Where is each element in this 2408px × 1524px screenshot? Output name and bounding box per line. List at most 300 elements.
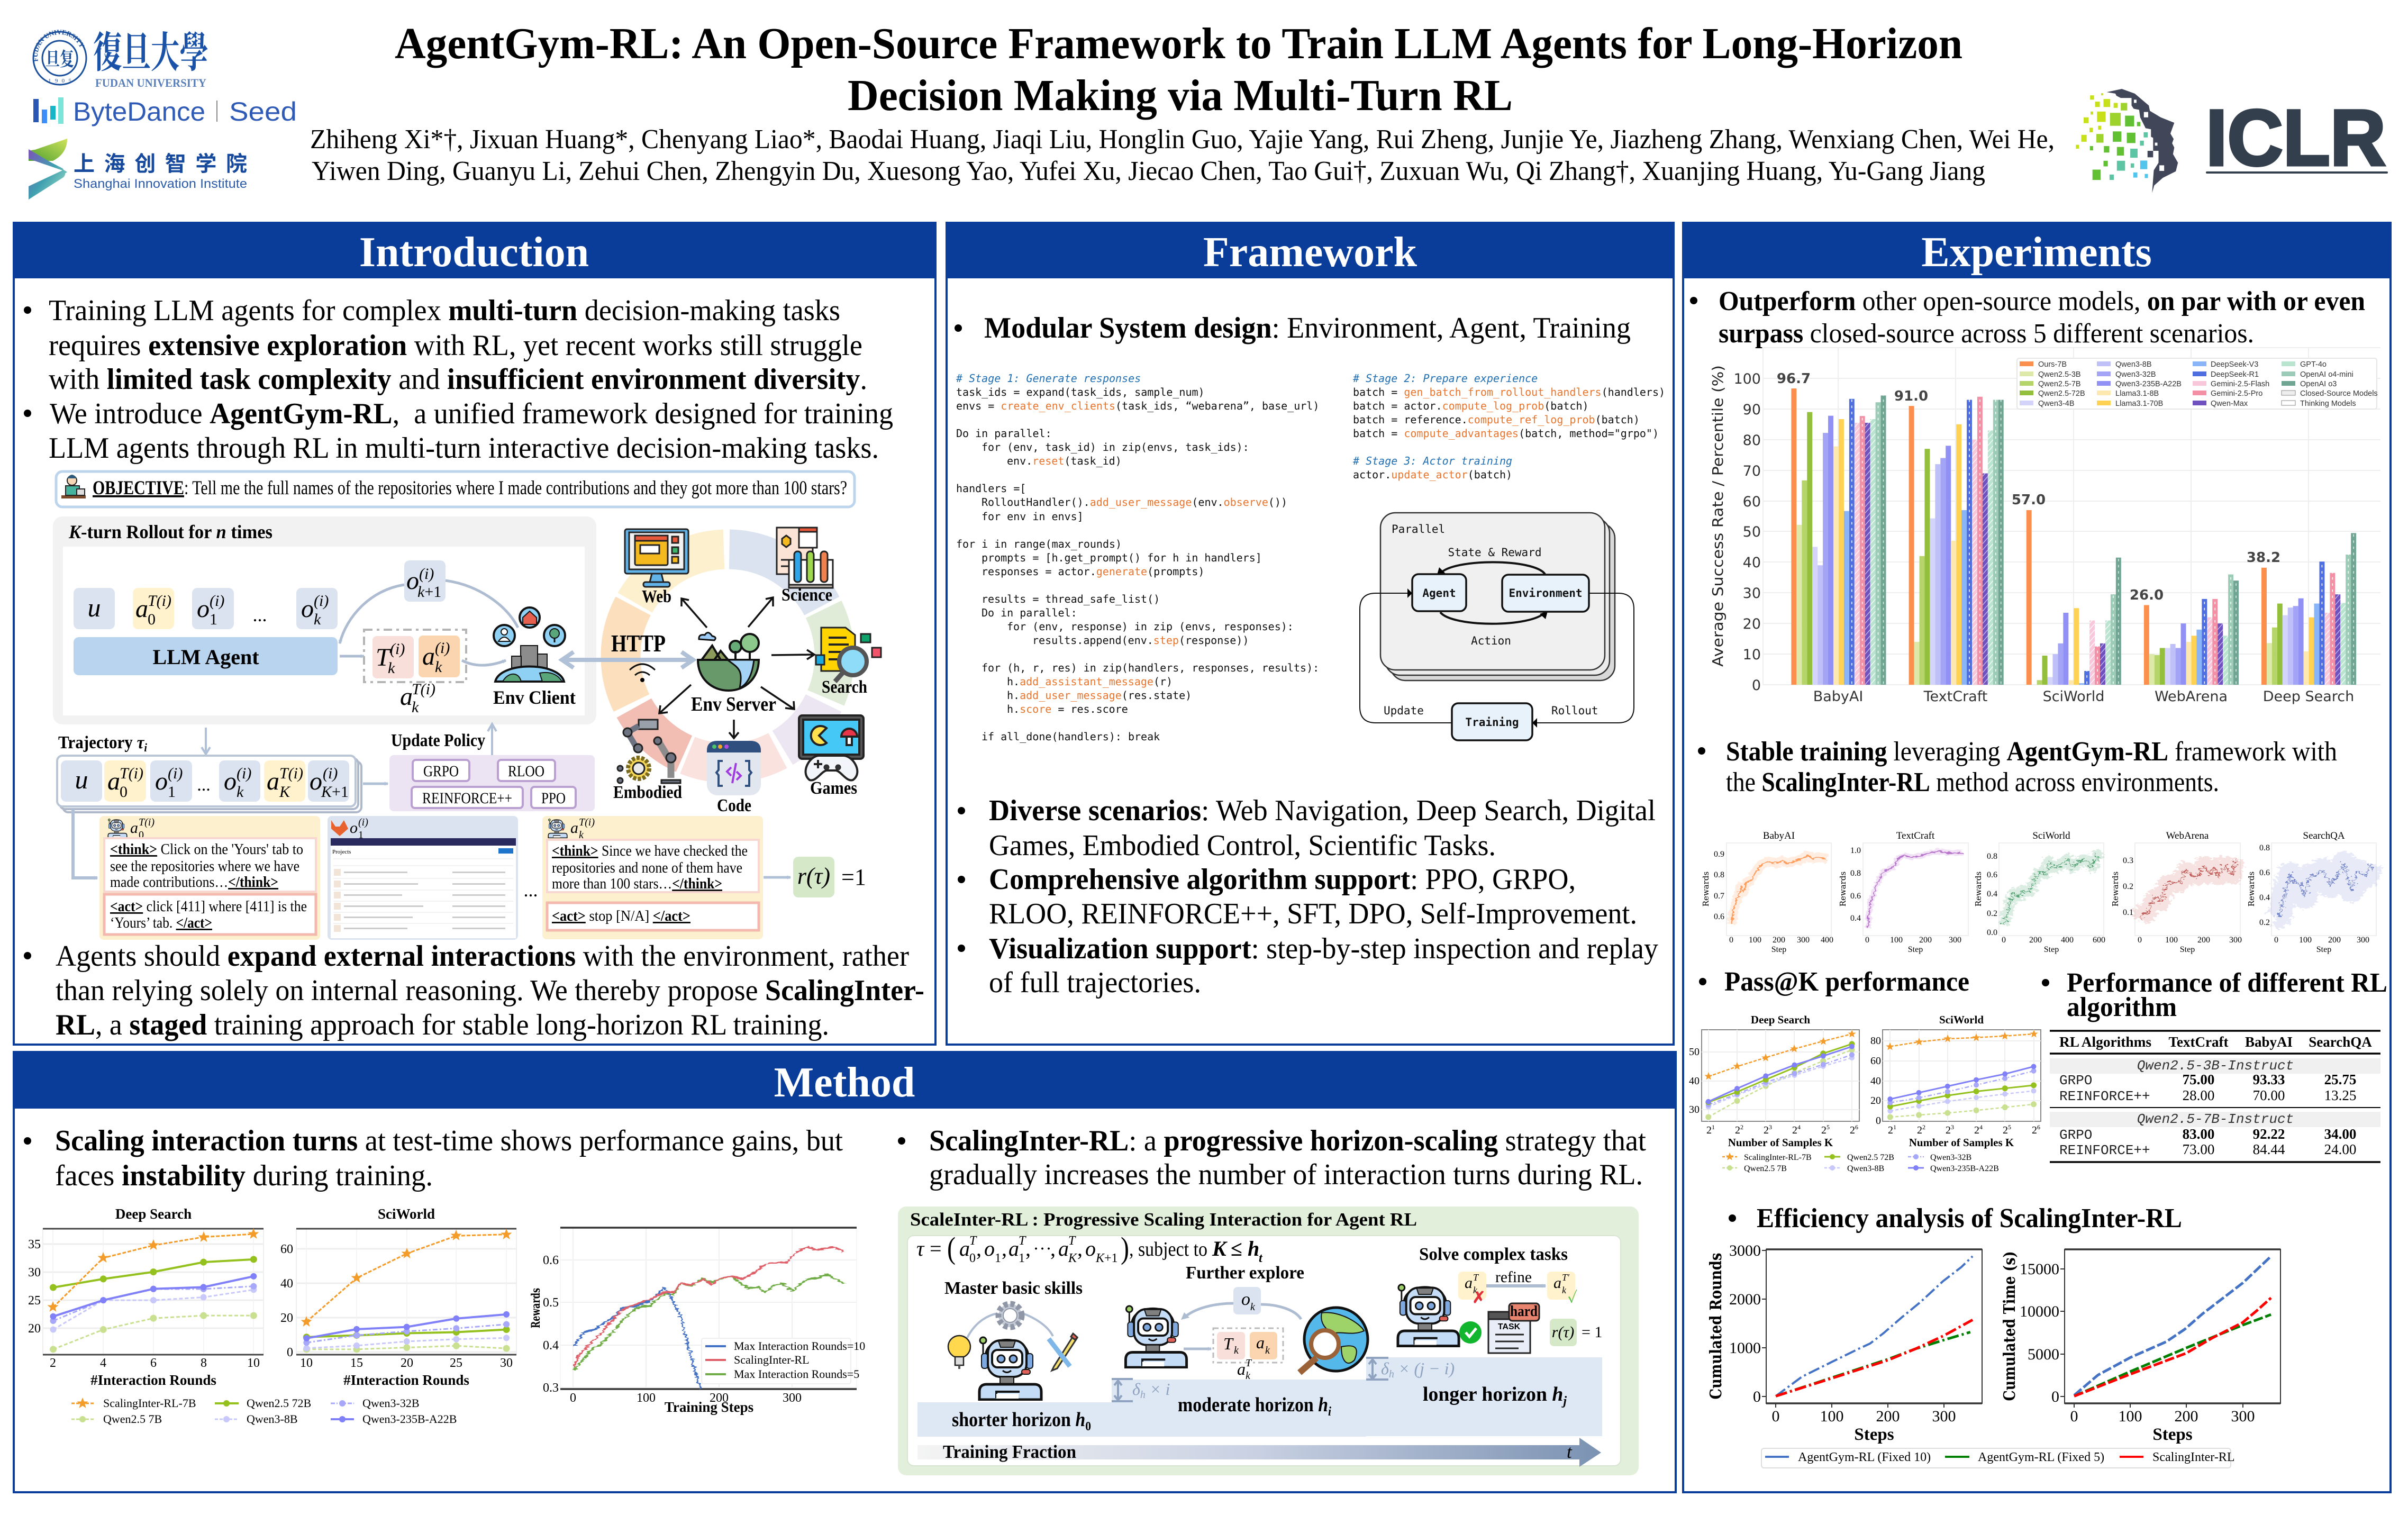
charts: pass@k: Deep Search — [1751, 1013, 1810, 1026]
panel: step a0: see the repositories where we have — [110, 858, 299, 875]
title: Decision Making via Multi-Turn RL — [848, 71, 1513, 120]
icon: fox — [331, 820, 348, 836]
charts: pass@k: 2 — [1792, 1124, 1797, 1136]
y axis label: Average Success Rate / Percentile (%) — [1709, 365, 1727, 667]
charts: interaction rounds: #Interaction Rounds — [90, 1372, 216, 1388]
formula: a — [959, 1237, 970, 1260]
text block: intro bullets: Training LLM agents for complex multi-turn decision-making tasks — [49, 294, 840, 327]
y axis ticks — [1733, 371, 1761, 694]
trajectory stack: (i) — [168, 765, 183, 782]
code: stage 1: envs = create_env_clients(task_ids, “webarena”, base_url) — [956, 400, 1319, 412]
formula: K — [1212, 1237, 1228, 1260]
action group: a — [422, 642, 435, 670]
x axis labels: BabyAI — [1813, 688, 1863, 705]
arrow: training fraction: Training Fraction — [943, 1441, 1076, 1462]
chart: training rewards: 0.3 — [543, 1381, 559, 1395]
charts: efficiency: 100 — [1820, 1408, 1843, 1425]
horizon steps — [917, 1357, 1602, 1437]
formula: , — [1002, 1237, 1007, 1260]
charts: efficiency: 2000 — [1729, 1291, 1761, 1308]
chart: training rewards: 0.6 — [543, 1254, 559, 1267]
formula: ) — [1121, 1231, 1129, 1265]
logo: Fudan University: 復旦大學 — [93, 19, 208, 79]
y axis ticks: 50 — [1743, 524, 1761, 540]
stage: further explore: k — [1250, 1301, 1256, 1313]
chart: training rewards: Max Interaction Rounds=5 — [734, 1367, 859, 1381]
code: stage 1: RolloutHandler().add_user_message(env.observe()) — [982, 496, 1287, 509]
legend: models: OpenAI o4-mini — [2300, 370, 2354, 379]
stage: solve complex tasks: a — [1465, 1274, 1473, 1292]
tokens row: (i) — [419, 565, 434, 583]
label: science: Science — [782, 585, 832, 605]
legend: models: Qwen3-32B — [2115, 370, 2156, 379]
bar value labels: 38.2 — [2247, 550, 2280, 566]
panel: ScaleInter-RL diagram — [898, 1206, 1639, 1475]
charts: efficiency: 200 — [2175, 1408, 2198, 1425]
charts: interaction rounds: 60 — [280, 1242, 293, 1256]
legend: pass@k — [1722, 1153, 1999, 1173]
text block: outperform: surpass closed-source across 5 different scenarios. — [1719, 319, 2254, 349]
charts: interaction rounds: 35 — [28, 1238, 41, 1251]
stage: master basic skills: Master basic skills — [944, 1278, 1083, 1298]
legend: models: DeepSeek-V3 — [2211, 360, 2258, 369]
charts: training curves: 0.4 — [1987, 890, 1997, 899]
logo: Fudan University: FUDAN UNIVERSITY — [95, 76, 206, 89]
charts: training curves: 200 — [1773, 936, 1785, 945]
legend: models: Qwen2.5-7B — [2038, 380, 2081, 388]
code: stage 1: for env in envs] — [982, 510, 1084, 523]
annotation: delta i: δ — [1132, 1380, 1140, 1399]
LLM agent bar — [74, 637, 338, 675]
charts: pass@k: 6 — [2037, 1123, 2040, 1131]
charts: interaction rounds — [28, 1206, 516, 1388]
charts: training curves: 400 — [1821, 936, 1833, 945]
text block: framework bullets: Diverse scenarios: Web Navigation, Deep Search, Digital — [989, 794, 1656, 827]
charts: training curves: Rewards — [1974, 872, 1983, 906]
formula: , — [1077, 1237, 1083, 1260]
stage: master basic skills: shorter horizon h — [952, 1409, 1087, 1431]
arrow: to reward — [764, 876, 790, 878]
charts: pass@k: 0 — [1876, 1115, 1881, 1127]
charts: training curves: 0 — [2002, 936, 2006, 945]
formula: , — [1025, 1237, 1031, 1260]
charts: training curves — [1701, 830, 2376, 954]
x axis labels: SciWorld — [2043, 688, 2104, 705]
charts: efficiency: 100 — [2119, 1408, 2142, 1425]
charts: training curves: 0 — [2138, 936, 2142, 945]
table: RL algorithms: GRPO — [2059, 1073, 2092, 1088]
icon: embodied — [617, 720, 680, 783]
legend: models: Llama3.1-8B — [2115, 389, 2159, 398]
charts: training curves: 200 — [2029, 936, 2042, 945]
text block: scalinginter-rl: ScalingInter-RL: a progressive horizon-scaling strategy that — [929, 1124, 1646, 1157]
y axis ticks: 30 — [1743, 585, 1761, 602]
title — [395, 19, 1962, 120]
charts: efficiency: Steps — [1854, 1425, 1894, 1444]
charts: interaction rounds: 25 — [28, 1294, 41, 1308]
charts: training curves: 0.8 — [2259, 843, 2270, 852]
charts: training curves: BabyAI — [1763, 830, 1795, 841]
trajectory stack: o — [310, 767, 322, 795]
label: update policy: Update Policy — [391, 731, 485, 750]
charts: training curves: Step — [2180, 945, 2195, 954]
text block: scaling interaction turns: Scaling interaction turns at test-time shows performance gains, but — [55, 1124, 843, 1157]
text block: intro bullets: LLM agents through RL in multi-turn interactive decision-making tasks. — [49, 432, 879, 465]
charts: training curves: Step — [2044, 945, 2059, 954]
charts: pass@k: 40 — [1870, 1075, 1881, 1087]
diagram: training loop: Environment — [1509, 587, 1583, 600]
charts: training curves: 0.0 — [1987, 928, 1997, 937]
charts: training curves: 100 — [2299, 936, 2312, 945]
charts: training curves: SciWorld — [2032, 830, 2070, 841]
formula: t — [1259, 1251, 1263, 1265]
text block: intro bullets: We introduce AgentGym-RL, a unified framework designed for training — [50, 397, 893, 430]
stage: further explore: k — [1246, 1370, 1251, 1382]
icon: success check — [1459, 1321, 1482, 1344]
tokens row: ... — [253, 604, 267, 625]
text block: framework bullets: RLOO, REINFORCE++, SFT, DPO, Self-Improvement. — [989, 897, 1637, 930]
heading: pass@k: Pass@K performance — [1724, 967, 1969, 997]
panel: step ak: repositories and none of them have — [552, 860, 742, 876]
icon: person at laptop — [61, 475, 86, 498]
panel: ScaleInter-RL diagram: ScaleInter-RL : Progressive Scaling Interaction for Agent RL — [910, 1209, 1417, 1230]
charts: training curves: 0.2 — [1987, 909, 1997, 918]
trajectory stack: k — [237, 783, 244, 801]
stage: solve complex tasks: hard — [1510, 1303, 1538, 1320]
code: stage 1: handlers =[ — [956, 482, 1026, 495]
stage: further explore: a — [1237, 1359, 1246, 1378]
panel: method — [14, 1052, 1676, 1492]
arrow: policy up — [488, 724, 496, 756]
legend: interaction rounds: Qwen3-32B — [362, 1396, 420, 1410]
icon: bulb — [948, 1336, 970, 1369]
charts: efficiency: 1000 — [1729, 1339, 1761, 1357]
charts: training curves: Step — [1908, 945, 1923, 954]
charts: pass@k — [1689, 1013, 2380, 1468]
code: stage 1: for i in range(max_rounds) — [956, 538, 1122, 550]
table: RL algorithms: 34.00 — [2324, 1126, 2356, 1142]
legend: efficiency: AgentGym-RL (Fixed 5) — [1978, 1450, 2104, 1464]
charts: efficiency: 300 — [2231, 1408, 2255, 1425]
legend: models: Gemini-2.5-Flash — [2211, 380, 2269, 388]
legend: interaction rounds: Qwen3-235B-A22B — [362, 1412, 457, 1426]
panel: step a0: <think> Click on the 'Yours' tab to — [110, 841, 303, 858]
formula: 0 — [969, 1251, 976, 1265]
stage: further explore: i — [1328, 1405, 1331, 1419]
table: RL algorithms: 28.00 — [2183, 1087, 2214, 1103]
legend: models: GPT-4o — [2300, 360, 2327, 369]
tokens row: u — [88, 593, 101, 622]
arrow: trajectory to steps — [73, 810, 97, 878]
stage: further explore: moderate horizon h — [1178, 1394, 1330, 1416]
formula: h — [1248, 1237, 1259, 1260]
table: RL algorithms: BabyAI — [2245, 1034, 2293, 1050]
action group: T — [376, 643, 392, 672]
legend: efficiency: ScalingInter-RL — [2152, 1450, 2234, 1464]
label: trajectory: Trajectory τ — [58, 733, 145, 752]
formula: 1 — [1019, 1251, 1025, 1265]
icon: gear — [998, 1304, 1022, 1327]
table: RL algorithms — [2050, 1031, 2380, 1162]
panel: step ak: <act> stop [N/A] </act> — [552, 908, 690, 924]
stage: master basic skills: 0 — [1085, 1420, 1091, 1434]
legend: models: DeepSeek-R1 — [2211, 370, 2259, 379]
charts: efficiency — [1707, 1242, 2280, 1444]
table: RL algorithms: 70.00 — [2253, 1087, 2285, 1103]
code: stage 1: task_ids = expand(task_ids, sample_num) — [956, 386, 1205, 398]
charts: efficiency: 0 — [2070, 1408, 2078, 1425]
stage: solve complex tasks: T′ — [1562, 1272, 1570, 1283]
code: stage 1: prompts = [h.get_prompt() for h in handlers] — [982, 551, 1262, 564]
panel: step ak — [542, 816, 763, 939]
stage: solve complex tasks: refine — [1495, 1268, 1532, 1286]
charts: training curves: 200 — [1919, 936, 1932, 945]
formula: , — [1050, 1237, 1056, 1260]
text block: intro bullets: requires extensive exploration with RL, yet recent works still struggle — [49, 329, 862, 362]
table: RL algorithms: 83.00 — [2183, 1126, 2214, 1142]
panel: framework — [947, 223, 1674, 1045]
charts: pass@k: 80 — [1870, 1035, 1881, 1047]
tokens row: o — [301, 595, 314, 623]
diagram: training loop: State & Reward — [1448, 546, 1542, 559]
charts: training curves: 300 — [2229, 936, 2242, 945]
charts: pass@k: 2 — [2032, 1124, 2037, 1136]
charts: interaction rounds: 30 — [500, 1356, 513, 1370]
action group — [364, 630, 466, 716]
label: env server: Env Server — [691, 693, 776, 715]
charts: pass@k: 2 — [1706, 1124, 1712, 1136]
code: stage 1: results = thread_safe_list() — [982, 593, 1160, 605]
label: HTTP with wifi icon — [611, 630, 666, 682]
action group: (i) — [390, 640, 405, 658]
tokens row: (i) — [210, 592, 224, 610]
charts: pass@k: 2 — [1922, 1123, 1925, 1131]
charts: pass@k: 3 — [1769, 1123, 1772, 1131]
formula: T — [1019, 1234, 1026, 1248]
table: RL algorithms: 93.33 — [2253, 1072, 2285, 1087]
charts: training curves: TextCraft — [1896, 830, 1935, 841]
legend: pass@k: Qwen3-8B — [1847, 1164, 1884, 1173]
charts: training curves: 0.6 — [1714, 912, 1724, 921]
y axis ticks: 100 — [1733, 371, 1761, 387]
stage: solve complex tasks: T — [1473, 1272, 1479, 1283]
panel: step ak: k — [579, 829, 584, 841]
charts: interaction rounds: 20 — [28, 1322, 41, 1336]
charts: training curves: 0.6 — [2259, 868, 2270, 877]
text block: stable training — [1698, 737, 2337, 797]
reward box: r(τ) — [797, 863, 830, 889]
panel: step a0: a — [130, 819, 138, 837]
text block: intro closing: RL, a staged training approach for stable long-horizon RL training. — [56, 1009, 829, 1041]
panel: step a0: <act> click [411] where [411] is the — [110, 899, 307, 915]
label: search: Search — [822, 677, 867, 697]
x axis labels: TextCraft — [1923, 688, 1987, 705]
stage: solve complex tasks: ✗ — [1472, 1289, 1486, 1307]
charts: efficiency: 0 — [1771, 1408, 1780, 1425]
charts: interaction rounds: 6 — [150, 1356, 157, 1370]
logo: ICLR — [2076, 89, 2388, 193]
charts: pass@k: 2 — [1821, 1124, 1827, 1136]
authors: Yiwen Ding, Guanyu Li, Zehui Chen, Zhengyin Du, Xuesong Yao, Yufei Xu, Jiecao Chen, Tao Gui†, Zuxuan Wu, Qi Zhang†, Xuanjing Huang, Yu-Gang Jiang — [312, 156, 1985, 186]
table: RL algorithms: Qwen2.5-3B-Instruct — [2137, 1058, 2294, 1074]
charts: training curves: WebArena — [2166, 830, 2209, 841]
code: stage 2 and 3: # Stage 3: Actor training — [1352, 455, 1512, 467]
chart: training rewards: 100 — [637, 1391, 656, 1405]
charts: pass@k: 4 — [1797, 1123, 1801, 1131]
code: stage 2 and 3: batch = actor.compute_log_prob(batch) — [1353, 400, 1589, 412]
icon: tools — [1049, 1334, 1077, 1371]
stage: solve complex tasks: j — [1561, 1394, 1567, 1408]
label: code: Code — [717, 796, 751, 815]
panel: step a0: 0 — [139, 829, 144, 841]
panel: step a0 — [99, 816, 320, 940]
charts: pass@k: 1 — [1893, 1123, 1896, 1131]
formula: = — [930, 1237, 942, 1260]
legend: interaction rounds: Qwen2.5 72B — [247, 1396, 311, 1410]
heading: Introduction — [14, 223, 935, 278]
charts: training curves: 600 — [2093, 936, 2105, 945]
legend: models: Ours-7B — [2038, 360, 2067, 369]
charts: training curves: 100 — [1749, 936, 1761, 945]
icon: env server — [698, 632, 759, 691]
charts: training curves: 0.8 — [1714, 870, 1724, 879]
logo: Fudan University — [33, 19, 208, 89]
code: stage 1: results.append(env.step(response)) — [1032, 634, 1249, 647]
heading: Framework: Framework — [1203, 229, 1417, 276]
panel: observation screenshot: Projects — [332, 849, 351, 855]
heading: RL algorithm performance — [2042, 968, 2387, 1022]
stage: further explore: k — [1234, 1345, 1239, 1356]
legend: interaction rounds: Qwen3-8B — [247, 1412, 298, 1426]
formula: , subject to — [1129, 1238, 1207, 1260]
code: stage 1: # Stage 1: Generate responses — [956, 372, 1141, 385]
stage: solve complex tasks: = 1 — [1582, 1323, 1602, 1341]
annotation: delta i — [1112, 1379, 1170, 1401]
legend: models: Qwen3-8B — [2115, 360, 2152, 369]
table: RL algorithms: GRPO — [2059, 1127, 2092, 1143]
panel: observation screenshot: 1 — [358, 829, 364, 841]
tokens row: o — [197, 595, 210, 623]
tokens row — [74, 560, 446, 629]
diagram: training loop: Parallel — [1392, 523, 1445, 536]
charts: training curves: 100 — [1890, 936, 1903, 945]
legend: models — [2017, 358, 2378, 409]
panel: policy algorithms: REINFORCE++ — [422, 790, 512, 807]
table: RL algorithms: 24.00 — [2324, 1141, 2356, 1157]
text block: outperform: Outperform other open-source models, on par with or even — [1719, 286, 2365, 316]
LLM agent bar: LLM Agent — [152, 645, 259, 669]
charts: training curves: 0.8 — [1850, 869, 1861, 878]
annotation: delta j-i: δ — [1381, 1359, 1389, 1378]
arrows: rollout loop — [340, 580, 518, 665]
charts: pass@k: 1 — [1712, 1123, 1715, 1131]
charts: training curves: 0.2 — [2259, 918, 2270, 927]
charts: pass@k: 5 — [2008, 1123, 2011, 1131]
charts: pass@k: 2 — [1740, 1123, 1743, 1131]
tokens row: 1 — [210, 611, 217, 628]
bar chart: success rate — [1709, 348, 2380, 705]
text block: intro bullets — [24, 294, 893, 465]
chart: training rewards: 200 — [710, 1391, 729, 1405]
heading: Framework — [947, 223, 1674, 278]
charts: pass@k: 2 — [1888, 1124, 1893, 1136]
legend: pass@k: Qwen2.5 7B — [1744, 1164, 1787, 1173]
chart: training rewards: 0.4 — [543, 1339, 559, 1353]
trajectory stack: o — [155, 767, 168, 795]
formula: K — [1068, 1251, 1078, 1265]
charts: pass@k: 4 — [1979, 1123, 1983, 1131]
charts: pass@k: 50 — [1689, 1046, 1700, 1058]
action group: T(i) — [412, 681, 435, 698]
tokens row: 0 — [148, 611, 156, 628]
text block: scalinginter-rl — [898, 1124, 1646, 1191]
tokens row: o — [406, 567, 419, 595]
code: stage 1: h.add_assistant_message(r) — [1007, 675, 1173, 688]
code: stage 2 and 3: batch = reference.compute_ref_log_prob(batch) — [1353, 413, 1640, 426]
y axis ticks: 70 — [1743, 463, 1761, 479]
chart: training rewards: ScalingInter-RL — [734, 1353, 810, 1366]
charts: training curves: 300 — [2357, 936, 2369, 945]
heading: Experiments — [1683, 223, 2391, 278]
legend: efficiency — [1761, 1448, 2234, 1468]
charts: training curves: 0.4 — [1850, 914, 1861, 923]
charts: interaction rounds: 10 — [247, 1356, 260, 1370]
x axis labels: WebArena — [2155, 688, 2228, 705]
charts: efficiency: Cumulated Time (s) — [2001, 1251, 2019, 1401]
charts: training curves: 100 — [2165, 936, 2178, 945]
formula: a — [1008, 1237, 1019, 1260]
arrow: rollout down to trajectory — [202, 728, 210, 754]
charts: efficiency: 300 — [1932, 1408, 1956, 1425]
code: stage 1: Do in parallel: — [956, 427, 1052, 440]
charts: interaction rounds: 0 — [287, 1346, 293, 1359]
code: stage 2 and 3: # Stage 2: Prepare experience — [1352, 372, 1538, 385]
charts: efficiency: 200 — [1876, 1408, 1900, 1425]
code: stage 1: for (h, r, res) in zip(handlers, responses, results): — [982, 661, 1319, 674]
y axis ticks: 10 — [1743, 647, 1761, 663]
stage: solve complex tasks: a — [1553, 1274, 1561, 1292]
panel: step ak: <think> Since we have checked the — [552, 843, 748, 859]
panel: observation screenshot: o — [350, 819, 358, 837]
arrows: env server to scenarios — [659, 597, 814, 738]
logo: ICLR: ICLR — [2206, 93, 2386, 182]
trajectory stack: a — [107, 767, 120, 795]
legend: pass@k: ScalingInter-RL-7B — [1744, 1153, 1812, 1162]
panel: policy algorithms: GRPO — [423, 763, 459, 780]
charts: interaction rounds: 4 — [100, 1356, 106, 1370]
text block: stable training: Stable training leveraging AgentGym-RL framework with — [1726, 737, 2337, 767]
charts: training curves: 0.8 — [1987, 852, 1997, 861]
formula: ⋯ — [1033, 1239, 1052, 1260]
charts: training curves: 400 — [2061, 936, 2074, 945]
text block: intro closing: Agents should expand external interactions with the environment, rather — [56, 940, 909, 973]
charts: interaction rounds: 2 — [50, 1356, 56, 1370]
code: stage 1: responses = actor.generate(prompts) — [982, 565, 1204, 578]
formula: K+1 — [1095, 1251, 1118, 1265]
formula: ≤ — [1231, 1237, 1242, 1260]
charts: pass@k: 6 — [1855, 1123, 1858, 1131]
action group: k — [435, 658, 442, 676]
icon: search — [816, 628, 881, 682]
text block: scalinginter-rl: gradually increases the number of interaction turns during RL. — [929, 1158, 1643, 1191]
text block: scaling interaction turns — [24, 1124, 843, 1192]
charts: training curves: 1.0 — [1850, 846, 1861, 855]
legend: models: Qwen3-4B — [2038, 400, 2075, 408]
title: AgentGym-RL: An Open-Source Framework to Train LLM Agents for Long-Horizon — [395, 19, 1962, 68]
charts: training curves: 200 — [2328, 936, 2341, 945]
ellipsis: ... — [524, 879, 538, 901]
code: stage 2 and 3: actor.update_actor(batch) — [1353, 468, 1512, 481]
